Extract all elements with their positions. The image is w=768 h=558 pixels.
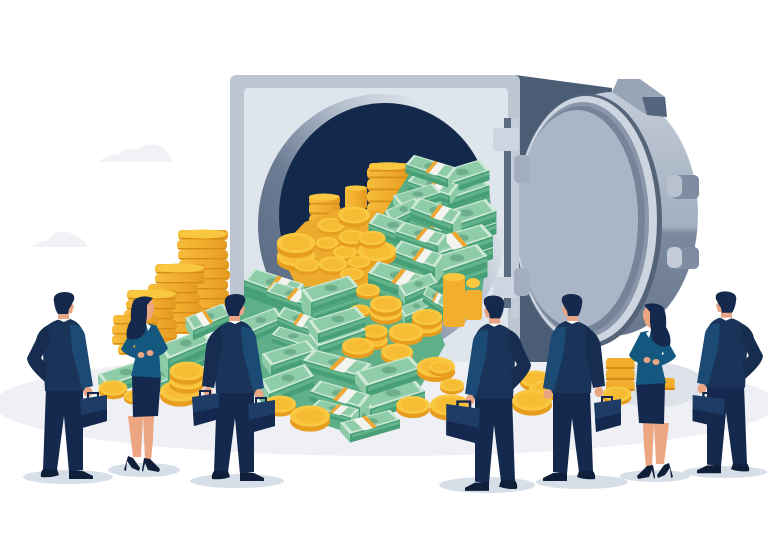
upper hinge [493,128,519,151]
hinge pillar [504,118,512,308]
lower bolt [667,247,699,269]
upper bolt [667,175,699,199]
backing: lower heap [205,285,445,430]
vault right side [515,75,612,362]
cloud: upper [98,144,172,162]
door rings [514,94,662,348]
person: businesswoman right [629,303,676,479]
locking block [612,79,667,117]
cash bundles: upper left heap [98,268,358,396]
upper lug [514,155,530,183]
vault frame [230,75,520,362]
door back band [526,92,698,336]
vault body [230,75,612,362]
vault panel [244,88,508,362]
door face [516,110,638,328]
cash bundles: centre stream [368,261,447,325]
backing: green heap [372,165,490,322]
gold coins: middle of heap [277,206,396,283]
coin stacks: left pile [112,230,230,355]
person shadows [23,463,767,493]
briefcase [80,393,107,428]
coin shadow right [605,363,705,407]
cloud: lower [32,232,87,247]
gold coins: right floor [396,357,675,421]
person: businessman far right [693,291,763,473]
person: businesswoman left [121,296,168,472]
person: businessman far left [27,292,107,479]
person: businessman centre right [446,295,531,491]
person: businessman centre left [192,294,275,481]
vault door [493,79,699,348]
opening rim [258,94,506,356]
vertical gold stacks [443,273,482,327]
gold coins: lower heap [99,284,442,407]
backing: gold heap [278,207,400,300]
cash bundles: back of vault [368,155,496,295]
briefcase [693,393,725,428]
opening interior [279,103,491,327]
briefcase [446,402,480,444]
lower hinge [493,277,517,298]
ground shadow [0,352,768,456]
briefcase left [192,391,219,426]
cash bundles: lower heap [238,306,425,443]
person: businessman right [543,294,621,481]
coin stacks: inside vault [309,162,410,227]
briefcase [594,397,621,432]
lower lug [514,268,530,296]
briefcase right [248,398,275,433]
